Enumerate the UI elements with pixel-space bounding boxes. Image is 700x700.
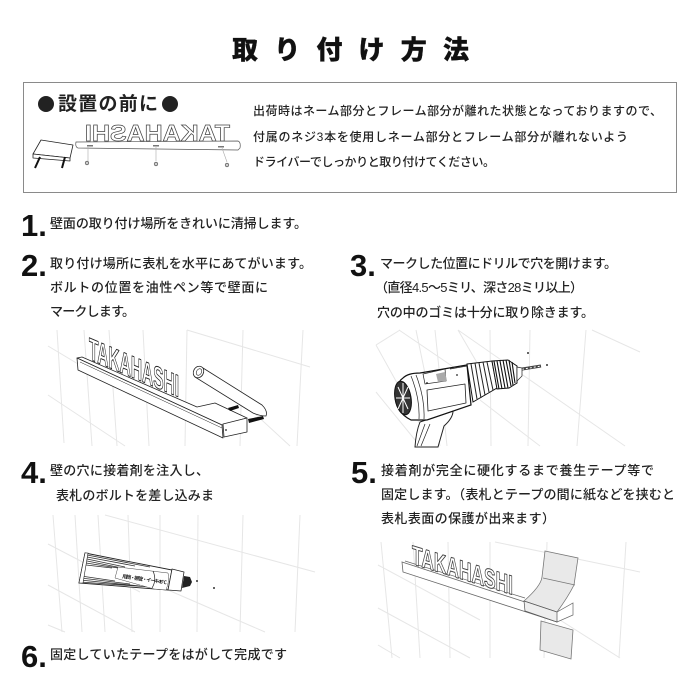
panel: before installation — [24, 82, 676, 192]
step 5 — [351, 455, 675, 526]
step 3: 3. — [350, 248, 376, 283]
tube label: 用簡・棚管・イーキ45℃ — [122, 573, 167, 586]
step 3: マークした位置にドリルで穴を開けます。 — [380, 256, 617, 271]
step 3: 穴の中のゴミは十分に取り除きます。 — [377, 305, 594, 320]
masking tape — [524, 551, 578, 612]
step 1: 壁面の取り付け場所をきれいに清掃します。 — [50, 216, 307, 231]
step 2: ボルトの位置を油性ペン等で壁面に — [50, 280, 268, 295]
step 4: 4. — [21, 455, 47, 490]
step 5: 接着剤が完全に硬化するまで養生テープ等で — [381, 463, 654, 478]
step 6: 6. — [21, 639, 47, 674]
step 2: マークします。 — [50, 304, 135, 319]
illustration: sign from behind — [33, 120, 240, 168]
step 1 — [21, 208, 307, 243]
title: 取り付け方法 — [232, 35, 469, 65]
illustration: sign from behind: TAKAHASHI — [85, 120, 230, 146]
panel body text — [253, 103, 662, 169]
step 3 — [350, 248, 617, 320]
panel body text: 出荷時はネーム部分とフレーム部分が離れた状態となっておりますので、 — [253, 103, 662, 118]
step 6 — [21, 639, 287, 674]
step 5: 固定します。（表札とテープの間に紙などを挟むと — [381, 487, 675, 502]
illustration: drill — [376, 330, 640, 447]
panel heading — [38, 93, 178, 115]
step 2: 取り付け場所に表札を水平にあてがいます。 — [50, 256, 312, 271]
step 4 — [21, 455, 214, 503]
panel heading: 設置の前に — [58, 93, 158, 115]
panel body text: 付属のネジ3本を使用しネーム部分とフレーム部分が離れないよう — [253, 129, 628, 144]
step 5: 表札表面の保護が出来ます） — [381, 511, 555, 526]
step 4: 表札のボルトを差し込みま — [56, 488, 214, 503]
step 1: 1. — [21, 208, 47, 243]
step 6: 固定していたテープをはがして完成です — [50, 647, 287, 662]
illustration: adhesive tube — [48, 515, 315, 632]
illustration: marking position with pen: TAKAHASHI — [89, 331, 179, 404]
illustration: taped sign: TAKAHASHI — [412, 540, 513, 601]
illustration: marking position with pen — [48, 330, 310, 446]
step 2: 2. — [21, 248, 47, 283]
panel body text: ドライバーでしっかりと取り付けてください。 — [253, 155, 495, 169]
step 5: 5. — [351, 455, 377, 490]
step 2 — [21, 248, 312, 319]
step 3: （直径4.5～5ミリ、深さ28ミリ以上） — [375, 280, 583, 295]
illustration: taped sign — [378, 540, 640, 659]
step 4: 壁の穴に接着剤を注入し、 — [50, 463, 209, 478]
